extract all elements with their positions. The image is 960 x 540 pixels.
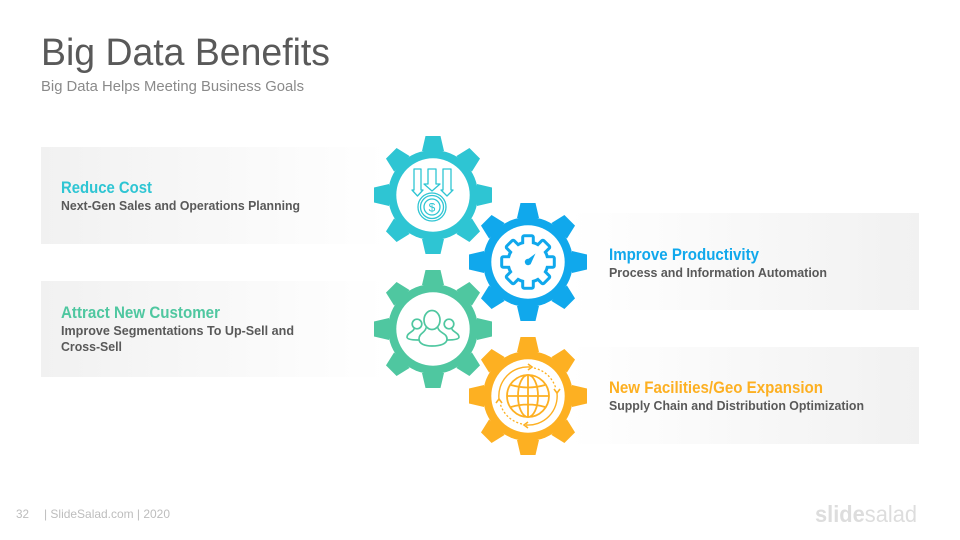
icon: dollar sign: $ — [429, 200, 436, 214]
heading: reduce cost: Reduce Cost — [61, 179, 152, 197]
logo: slidesalad: slidesalad — [815, 501, 917, 527]
heading: attract new customer: Attract New Customer — [61, 304, 221, 322]
title: Big Data Benefits — [41, 32, 330, 74]
panel: attract new customer — [41, 281, 386, 377]
icon: arrows and coin — [412, 169, 453, 221]
text: reduce cost: Next-Gen Sales and Operations Planning — [61, 199, 300, 213]
footer: source: | SlideSalad.com | 2020 — [44, 507, 170, 521]
text: attract new customer: Cross-Sell — [61, 340, 122, 354]
icon: gear gauge — [503, 237, 553, 287]
gear: teal — [374, 136, 492, 254]
gear: orange — [469, 337, 587, 455]
panel: new facilities — [570, 347, 919, 444]
footer: page number: 32 — [16, 507, 29, 521]
heading: new facilities: New Facilities/Geo Expansion — [609, 379, 823, 397]
gear: green — [374, 270, 492, 388]
gear: blue — [469, 203, 587, 321]
subtitle: Big Data Helps Meeting Business Goals — [41, 78, 304, 95]
text: new facilities: Supply Chain and Distribution Optimization — [609, 399, 864, 413]
text: attract new customer — [61, 324, 294, 354]
text: attract new customer: Improve Segmentations To Up-Sell and — [61, 324, 294, 338]
text: improve productivity: Process and Information Automation — [609, 266, 827, 280]
panel: improve productivity — [570, 213, 919, 310]
icon: globe with arrows — [496, 364, 560, 428]
icon: people — [407, 310, 459, 346]
heading: improve productivity: Improve Productivity — [609, 246, 760, 264]
panel: reduce cost — [41, 147, 386, 244]
